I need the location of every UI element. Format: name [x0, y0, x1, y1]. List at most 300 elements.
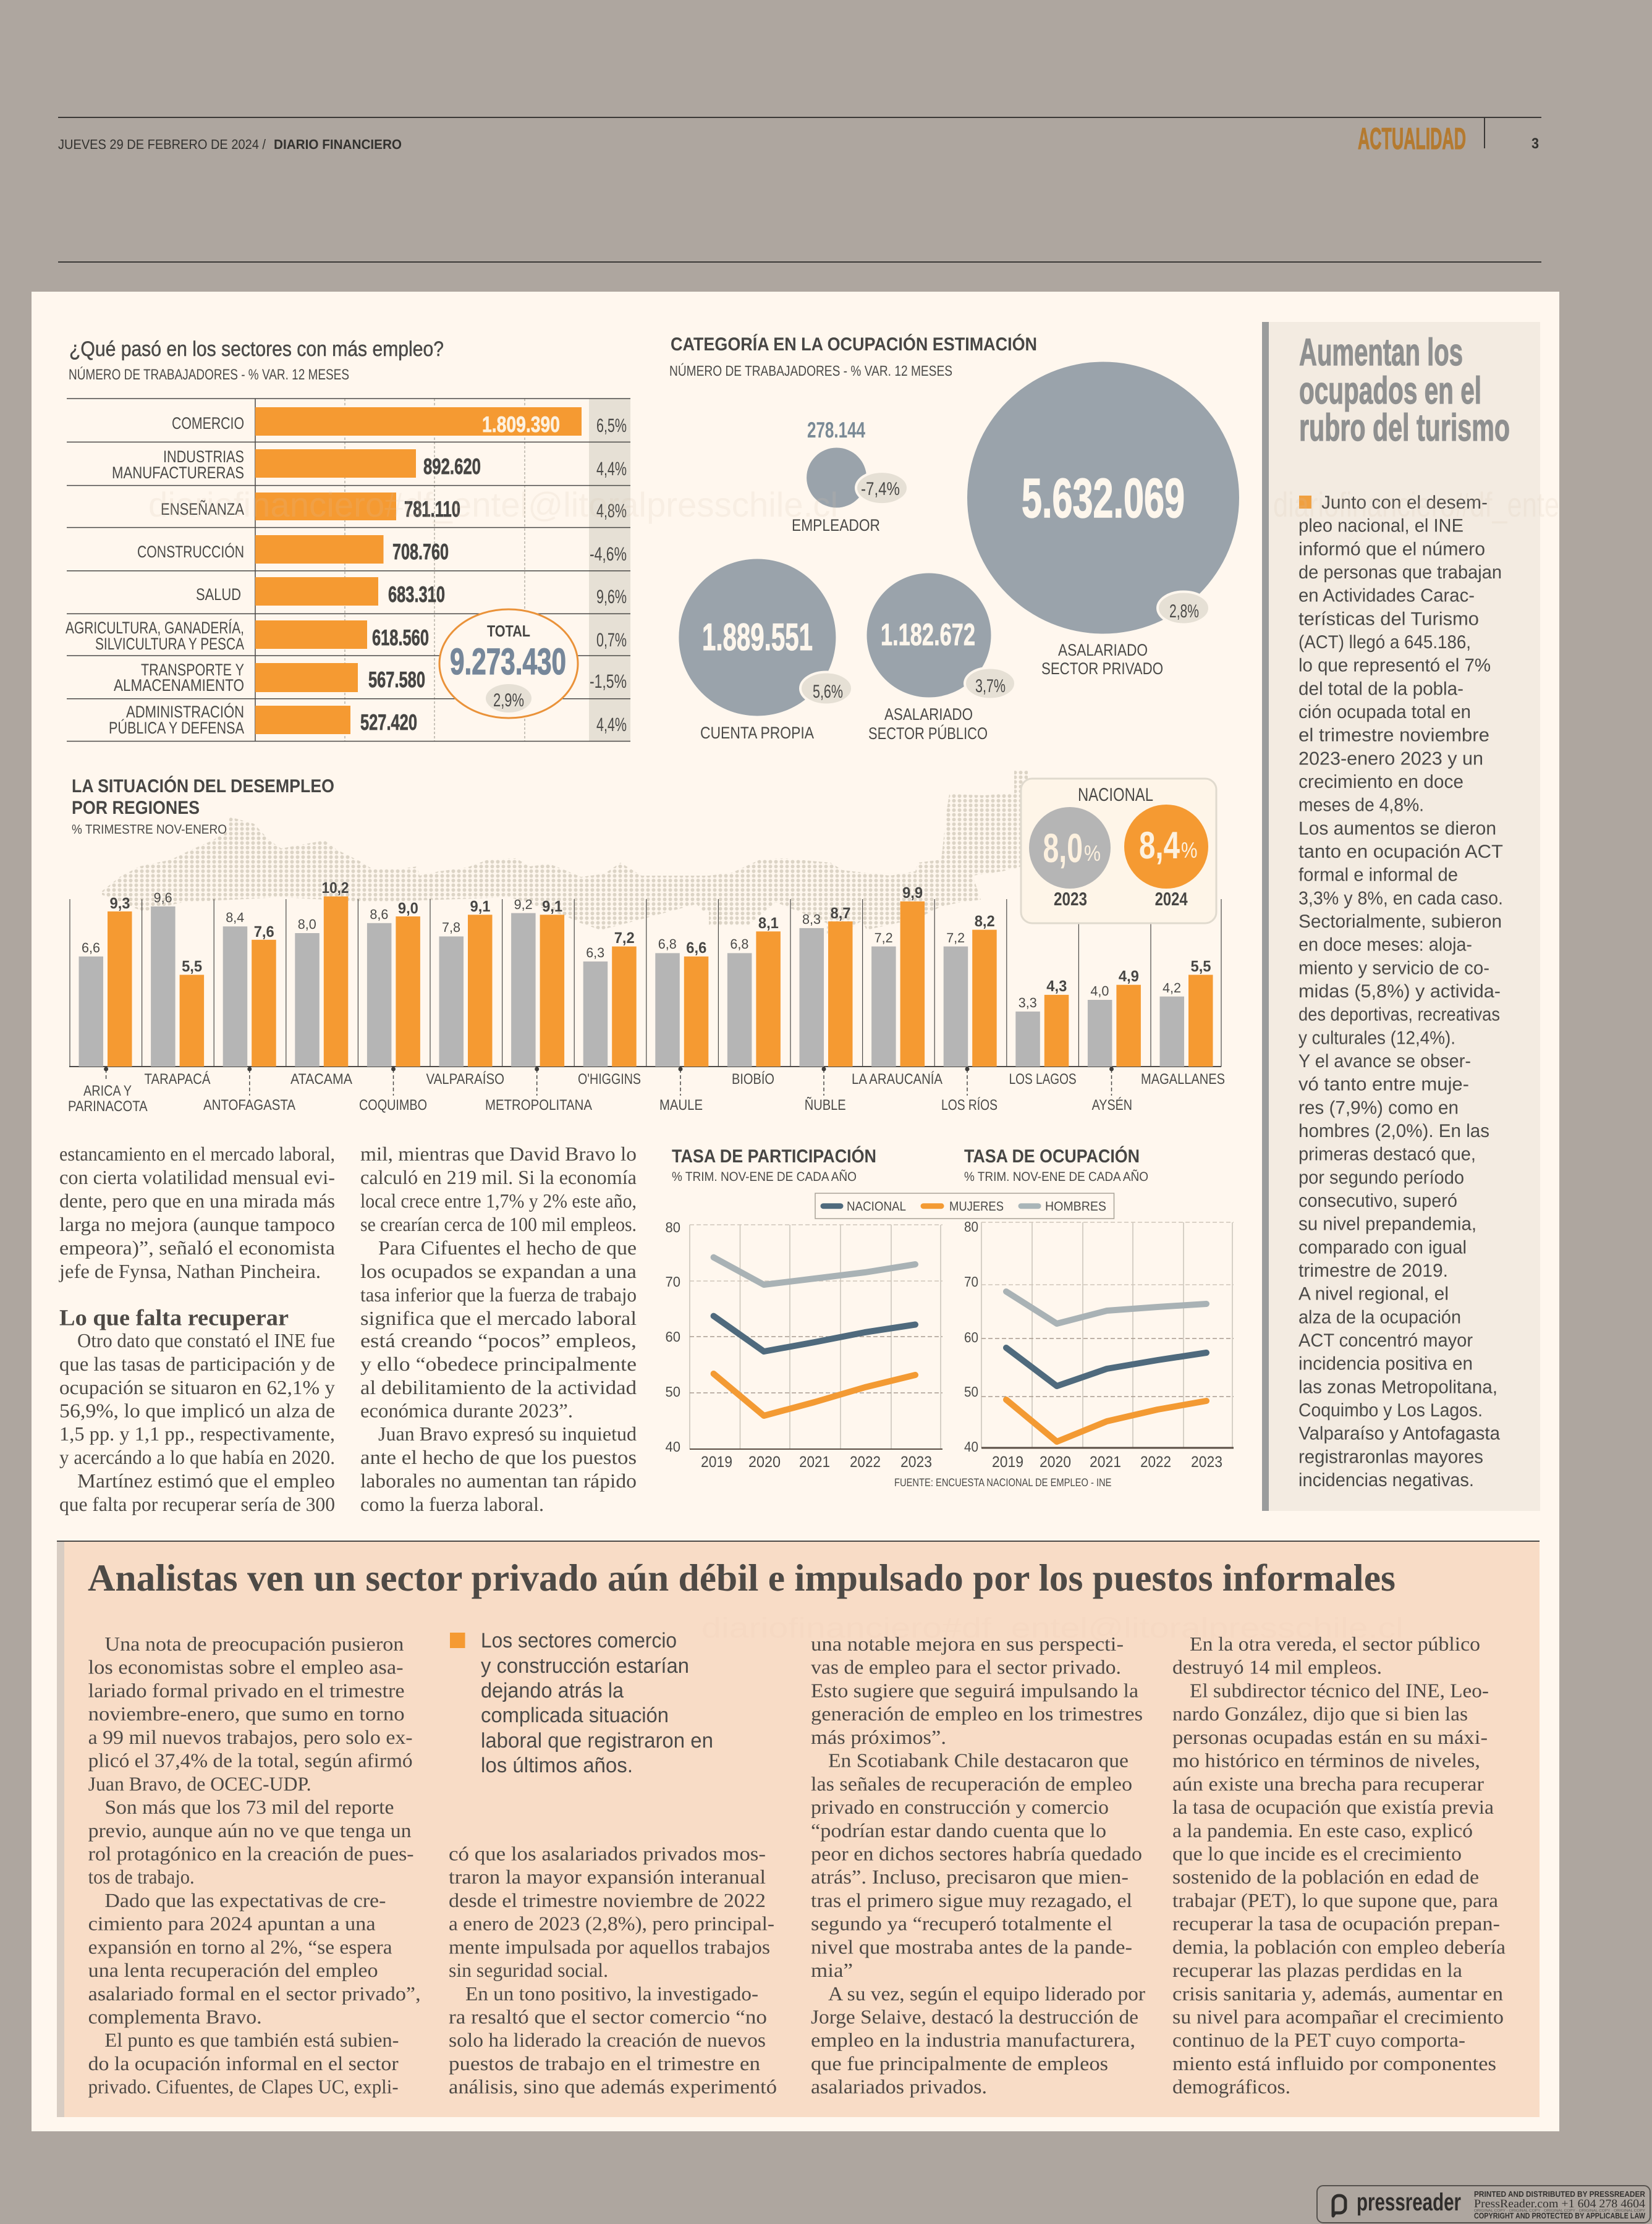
- watermark text, sectores row: diariofinanciero#df_ente: [1273, 485, 1559, 524]
- percent variation column: 4,4%: [596, 458, 627, 480]
- sector labels: PÚBLICA Y DEFENSA: [109, 719, 244, 737]
- article column 1: a 99 mil nuevos trabajos, pero solo ex-: [88, 1726, 413, 1748]
- sidebar body text: miento y servicio de co-: [1298, 958, 1489, 978]
- national comparison box: %: [1084, 840, 1101, 866]
- article column: second text: calculó en 219 mil. Si la economía: [360, 1166, 637, 1188]
- article column: left text: larga no mejora (aunque tampoco: [59, 1213, 335, 1235]
- grey value labels (2023): 6,8: [730, 936, 748, 952]
- main cream page panel: [32, 292, 1559, 2131]
- article column 3: las señales de recuperación de empleo: [811, 1772, 1132, 1795]
- heading: desempleo: [72, 776, 334, 818]
- sidebar body text: Sectorialmente, subieron: [1298, 911, 1502, 932]
- article column 1: los economistas sobre el empleo asa-: [88, 1656, 404, 1678]
- bar values: 892.620: [423, 454, 481, 479]
- article column 3: tras el primero sigue muy rezagado, el: [811, 1889, 1132, 1911]
- sector labels: AGRICULTURA, GANADERÍA,: [66, 619, 244, 637]
- sector labels: MANUFACTURERAS: [112, 463, 244, 482]
- article column 2: mente impulsada por aquellos trabajos: [449, 1935, 770, 1958]
- line charts panel: [665, 1146, 1234, 1489]
- sidebar body text: las zonas Metropolitana,: [1298, 1377, 1497, 1397]
- sidebar body text: meses de 4,8%.: [1298, 795, 1424, 816]
- bubble: cuenta propia: 1.889.551: [702, 616, 813, 659]
- sector labels: [66, 414, 244, 737]
- article column 4: recuperar la tasa de ocupación prepan-: [1172, 1913, 1500, 1935]
- line chart: tasa de ocupación: 50: [964, 1384, 978, 1400]
- region name labels: METROPOLITANA: [485, 1097, 592, 1114]
- heading: sectores: ¿Qué pasó en los sectores con más empleo?: [69, 337, 444, 361]
- subheading: desempleo: % TRIMESTRE NOV-ENERO: [72, 822, 227, 837]
- region name labels: ÑUBLE: [805, 1096, 846, 1114]
- sector labels: INDUSTRIAS: [163, 447, 244, 466]
- pull quote: dejando atrás la: [481, 1679, 624, 1702]
- line chart: tasa de participación: 60: [665, 1329, 680, 1345]
- total callout: 9.273.430: [450, 641, 566, 682]
- percent variation column: 9,6%: [596, 586, 627, 607]
- sidebar body text: por segundo período: [1298, 1167, 1464, 1188]
- article column 1: Una nota de preocupación pusieron: [104, 1633, 404, 1655]
- article column: left text: ocupación se situaron en 62,1% y: [59, 1376, 335, 1398]
- map of Chile, dotted: [102, 771, 1028, 935]
- sidebar body text: lo que representó el 7%: [1298, 656, 1491, 676]
- article column 3: asalariados privados.: [811, 2076, 987, 2098]
- article column: left text: Otro dato que constató el INE fue: [77, 1329, 335, 1351]
- grey value labels (2023): 8,0: [298, 916, 316, 932]
- orange value labels (2024): 4,9: [1119, 968, 1139, 985]
- pull quote: y construcción estarían: [481, 1654, 689, 1678]
- sidebar body text: Coquimbo y Los Lagos.: [1298, 1400, 1483, 1421]
- sidebar body text: vó tanto entre muje-: [1298, 1075, 1469, 1095]
- orange value labels (2024): 9,1: [470, 898, 491, 915]
- bubble: asalariado sector privado: ASALARIADO: [1058, 641, 1148, 659]
- article column 3: segundo ya “recuperó totalmente el: [811, 1913, 1112, 1935]
- grey value labels (2023): 7,8: [442, 920, 460, 935]
- sidebar body text: midas (5,8%) y activida-: [1298, 981, 1501, 1002]
- page header: [58, 117, 1541, 263]
- sidebar body text: pleo nacional, el INE: [1298, 516, 1464, 536]
- article column 1: previo, aunque aún no ve que tenga un: [88, 1819, 412, 1841]
- article column 1: Son más que los 73 mil del reporte: [104, 1796, 394, 1818]
- sidebar body text: el trimestre noviembre: [1298, 725, 1489, 746]
- pressreader badge: pressreader: [1357, 2189, 1461, 2216]
- article column 4: mo histórico en términos de niveles,: [1172, 1749, 1480, 1772]
- sector labels: COMERCIO: [172, 414, 244, 433]
- line chart: tasa de participación: 2020: [748, 1453, 781, 1471]
- article column 1: una lenta recuperación del empleo: [88, 1959, 378, 1981]
- orange value labels (2024): 9,1: [542, 898, 562, 915]
- line chart: tasa de ocupación: 2020: [1040, 1453, 1071, 1471]
- national comparison box: 2024: [1155, 889, 1188, 910]
- sidebar body text: A nivel regional, el: [1298, 1284, 1449, 1304]
- orange value labels (2024): 7,2: [614, 929, 635, 947]
- sidebar body text: informó que el número: [1298, 539, 1485, 559]
- line chart: tasa de participación: 2021: [799, 1453, 830, 1471]
- article column: second text: al debilitamiento de la actividad: [360, 1376, 637, 1398]
- orange value labels (2024): 7,6: [254, 923, 274, 941]
- sidebar heading: [1299, 331, 1510, 449]
- heading: desempleo: POR REGIONES: [72, 798, 200, 818]
- article column: left text: que las tasas de participación y de: [59, 1353, 335, 1375]
- article column 4: trabajar (PET), lo que supone que, para: [1172, 1889, 1498, 1911]
- bar values: 683.310: [388, 581, 445, 607]
- article column 2: solo ha liderado la creación de nuevos: [449, 2029, 766, 2051]
- article column 3: más próximos”.: [811, 1726, 946, 1748]
- line chart: tasa de ocupación: 2022: [1140, 1453, 1171, 1471]
- sector labels: ALMACENAMIENTO: [114, 676, 244, 695]
- sidebar body text: des deportivas, recreativas: [1298, 1005, 1500, 1025]
- sidebar body text: res (7,9%) como en: [1298, 1097, 1459, 1118]
- grey value labels (2023): 4,0: [1090, 983, 1109, 999]
- bubble: cuenta propia: [679, 559, 852, 742]
- sidebar body text: consecutivo, superó: [1298, 1191, 1457, 1211]
- percent variation column: -4,6%: [590, 543, 627, 565]
- article column 1: [88, 1633, 421, 2098]
- percent variation column: 0,7%: [596, 629, 627, 651]
- sidebar body text: [1298, 493, 1503, 1490]
- line chart: tasa de ocupación: 70: [964, 1274, 978, 1290]
- article column: left text: [59, 1143, 335, 1515]
- grey value labels (2023): 4,2: [1163, 980, 1181, 996]
- article column 4: destruyó 14 mil empleos.: [1172, 1656, 1382, 1678]
- sidebar body text: registraronlas mayores: [1298, 1447, 1483, 1467]
- article column 1: lariado formal privado en el trimestre: [88, 1679, 405, 1701]
- article column: second text: ante el hecho de que los puestos: [360, 1446, 637, 1468]
- region name labels: COQUIMBO: [359, 1097, 427, 1114]
- article column 1: Dado que las expectativas de cre-: [104, 1889, 386, 1911]
- sidebar body text: formal e informal de: [1298, 865, 1458, 886]
- bar chart panel: sectores con más empleo: [66, 337, 630, 742]
- orange value labels (2024): 9,9: [902, 884, 923, 902]
- line chart: tasa de ocupación: [964, 1219, 1234, 1471]
- region name labels: VALPARAÍSO: [426, 1071, 504, 1088]
- pressreader badge: ORIGINAL COPY · ORIGINAL COPY · ORIGINAL COPY · ORIGINAL COPY · ORIGINAL COPY: [1474, 2209, 1645, 2213]
- grey value labels (2023): 6,6: [82, 940, 100, 955]
- page header: 3: [1531, 135, 1539, 152]
- national comparison box: 2023: [1054, 889, 1087, 910]
- line chart: tasa de participación: 2023: [900, 1453, 932, 1471]
- orange value labels (2024): 8,1: [758, 915, 779, 932]
- pull quote: [481, 1629, 713, 1777]
- sidebar body text: (ACT) llegó a 645.186,: [1298, 632, 1471, 653]
- region name labels: TARAPACÁ: [145, 1071, 210, 1088]
- orange value labels (2024): 10,2: [321, 879, 349, 897]
- sector labels: ENSEÑANZA: [161, 500, 244, 518]
- article column: left text: dente, pero que en una mirada más: [59, 1190, 335, 1212]
- pressreader badge: [1317, 2186, 1650, 2223]
- sidebar body text: ACT concentró mayor: [1298, 1330, 1473, 1351]
- sidebar body text: trimestre de 2019.: [1298, 1261, 1448, 1281]
- bubble: cuenta propia: CUENTA PROPIA: [700, 724, 814, 742]
- sidebar body text: y culturales (12,4%).: [1298, 1028, 1455, 1048]
- grey value labels (2023): 6,8: [658, 936, 677, 952]
- article column 3: atrás”. Incluso, precisaron que mien-: [811, 1866, 1129, 1888]
- watermark text, sectores row: diariofinanciero#df_entel@litoralpresschile.cl: [148, 485, 838, 524]
- grey value labels (2023): [82, 890, 1181, 1010]
- region name labels: ARICA Y: [83, 1083, 132, 1099]
- article column: second text: Para Cifuentes el hecho de que: [378, 1237, 637, 1259]
- region name labels: BIOBÍO: [732, 1071, 774, 1088]
- article column 3: una notable mejora en sus perspecti-: [811, 1633, 1124, 1655]
- subheading: categoría: NÚMERO DE TRABAJADORES - % VAR. 12 MESES: [669, 363, 952, 379]
- article column: second text: se crearían cerca de 100 mil empleos.: [360, 1213, 637, 1235]
- sidebar body text: 2023-enero 2023 y un: [1298, 748, 1483, 769]
- grey value labels (2023): 3,3: [1019, 995, 1037, 1010]
- bar values: 708.760: [392, 539, 449, 564]
- bar values: 527.420: [360, 709, 417, 735]
- article column 1: asalariado formal en el sector privado”,: [88, 1982, 421, 2005]
- total callout: TOTAL: [487, 622, 530, 640]
- sidebar body text: terísticas del Turismo: [1298, 609, 1479, 629]
- orange value labels (2024): 8,2: [975, 913, 995, 930]
- bubble: empleador: 278.144: [807, 417, 865, 442]
- legend: NACIONAL: [847, 1199, 906, 1214]
- bar values: 1.809.390: [482, 412, 560, 437]
- article column 1: complementa Bravo.: [88, 2006, 262, 2028]
- sector labels: ADMINISTRACIÓN: [126, 703, 244, 721]
- subheading: tasa de ocupación: % TRIM. NOV-ENE DE CADA AÑO: [964, 1169, 1148, 1184]
- sidebar heading: ocupados en el: [1299, 370, 1481, 412]
- region name labels: LA ARAUCANÍA: [852, 1071, 942, 1088]
- grey value labels (2023): 8,3: [802, 911, 821, 927]
- line chart: tasa de participación: 80: [665, 1219, 680, 1235]
- sidebar heading: rubro del turismo: [1299, 407, 1510, 449]
- sidebar body text: Los aumentos se dieron: [1298, 818, 1496, 839]
- article column 2: có que los asalariados privados mos-: [449, 1843, 766, 1865]
- article column 1: rol protagónico en la creación de pues-: [88, 1843, 414, 1865]
- line chart: tasa de participación: 2019: [701, 1453, 732, 1471]
- sidebar body text: incidencias negativas.: [1298, 1470, 1474, 1490]
- line chart: tasa de participación: [665, 1219, 942, 1471]
- bubble: empleador: -7,4%: [861, 479, 900, 499]
- article column 4: su nivel para acompañar el crecimiento: [1172, 2006, 1504, 2028]
- sidebar body text: crecimiento en doce: [1298, 772, 1464, 792]
- national comparison box: 8,0: [1043, 825, 1083, 871]
- article column 1: plicó el 37,4% de la total, según afirmó: [88, 1749, 413, 1772]
- sidebar body text: Junto con el desem-: [1321, 493, 1488, 513]
- subheading: sectores: NÚMERO DE TRABAJADORES - % VAR. 12 MESES: [69, 366, 349, 383]
- sidebar body text: hombres (2,0%). En las: [1298, 1121, 1489, 1141]
- article column 3: nivel que mostraba antes de la pande-: [811, 1935, 1132, 1958]
- percent variation column: 4,8%: [596, 500, 627, 522]
- article column 4: sostenido de la población en edad de: [1172, 1866, 1479, 1888]
- article column 4: aún existe una brecha para recuperar: [1172, 1772, 1484, 1795]
- sidebar body text: en Actividades Carac-: [1298, 586, 1475, 606]
- article column: second text: significa que el mercado laboral: [360, 1307, 637, 1329]
- line chart: tasa de ocupación: 2021: [1090, 1453, 1121, 1471]
- grey value labels (2023): 7,2: [946, 930, 965, 945]
- article column 4: recuperar las plazas perdidas en la: [1172, 1959, 1462, 1981]
- page header: ACTUALIDAD: [1358, 122, 1466, 156]
- region name labels: O'HIGGINS: [578, 1071, 641, 1088]
- grey value labels (2023): 6,3: [586, 945, 604, 960]
- bubble: empleador: [792, 417, 908, 535]
- article column: left text: y acercándo a lo que había en 2020.: [59, 1446, 335, 1468]
- bubble: asalariado sector público: [866, 573, 1015, 743]
- percent variation column: -1,5%: [590, 670, 627, 692]
- sidebar body text: Y el avance se obser-: [1298, 1051, 1471, 1072]
- sidebar body text: 3,3% y 8%, en cada caso.: [1298, 888, 1503, 908]
- article column 2: sin seguridad social.: [449, 1959, 608, 1981]
- region name labels: MAULE: [659, 1097, 703, 1114]
- article column 3: A su vez, según el equipo liderado por: [828, 1982, 1145, 2005]
- article column 4: que lo que incide es el crecimiento: [1172, 1843, 1462, 1865]
- article column: left text: 1,5 pp. y 1,1 pp., respectivamente,: [59, 1423, 335, 1445]
- bubble: asalariado sector privado: 2,8%: [1169, 601, 1199, 622]
- region name labels: PARINACOTA: [68, 1098, 148, 1115]
- article column 2: En un tono positivo, la investigado-: [465, 1982, 758, 2005]
- article column 3: que fue principalmente de empleos: [811, 2052, 1108, 2074]
- percent variation column: [590, 415, 627, 735]
- line chart: tasa de ocupación: 40: [964, 1439, 978, 1455]
- article column 4: continuo de la PET cuyo comporta-: [1172, 2029, 1465, 2051]
- article column: left text: empeora)”, señaló el economista: [59, 1237, 335, 1259]
- article column: left text: que falta por recuperar sería de 300: [59, 1493, 335, 1515]
- icon: pressreader logo: [1333, 2196, 1345, 2216]
- national comparison box: [1021, 779, 1216, 923]
- article column: second text: los ocupados se expandan a una: [360, 1260, 637, 1282]
- grey value labels (2023): 9,2: [514, 897, 533, 912]
- article column: second text: laborales no aumentan tan rápido: [360, 1469, 637, 1492]
- sidebar body text: en doce meses: aloja-: [1298, 935, 1472, 955]
- article column 2: desde el trimestre noviembre de 2022: [449, 1889, 766, 1911]
- bubble: empleador: EMPLEADOR: [792, 516, 880, 535]
- heading: tasa de participación: TASA DE PARTICIPACIÓN: [672, 1146, 876, 1167]
- pull quote: los últimos años.: [481, 1754, 633, 1777]
- icon: orange square: [450, 1633, 465, 1648]
- article column: second text: tasa inferior que la fuerza de trabajo: [360, 1283, 637, 1306]
- orange value labels (2024): 9,3: [110, 895, 130, 912]
- line chart: tasa de ocupación: 2023: [1191, 1453, 1222, 1471]
- article column: left text: con cierta volatilidad mensual evi-: [59, 1166, 335, 1188]
- article column 4: la tasa de ocupación que existía previa: [1172, 1796, 1494, 1818]
- line chart: tasa de participación: 50: [665, 1384, 680, 1400]
- region name labels: [68, 1071, 1225, 1115]
- sector labels: TRANSPORTE Y: [141, 661, 244, 679]
- sector labels: CONSTRUCCIÓN: [137, 543, 244, 561]
- article column 3: privado en construcción y comercio: [811, 1796, 1109, 1818]
- bubble chart panel: categoría en la ocupación: [669, 334, 1239, 743]
- line chart: tasa de participación: 2022: [850, 1453, 881, 1471]
- bubble: asalariado sector público: 3,7%: [975, 676, 1006, 696]
- bubble: asalariado sector público: ASALARIADO: [884, 705, 973, 724]
- bar values: 618.560: [372, 625, 429, 650]
- orange value labels (2024): 5,5: [1190, 958, 1211, 975]
- sidebar body text: su nivel prepandemia,: [1298, 1214, 1476, 1235]
- sidebar body text: alza de la ocupación: [1298, 1307, 1461, 1327]
- article column 2: a enero de 2023 (2,8%), pero principal-: [449, 1913, 774, 1935]
- article column 4: personas ocupadas están en su máxi-: [1172, 1726, 1488, 1748]
- pull quote: laboral que registraron en: [481, 1729, 713, 1753]
- article column: left text: Lo que falta recuperar: [59, 1305, 289, 1331]
- article column: left text: estancamiento en el mercado laboral,: [59, 1143, 335, 1165]
- grey value labels (2023): 8,4: [226, 910, 244, 925]
- percent variation column: 6,5%: [596, 415, 627, 436]
- page header: JUEVES 29 DE FEBRERO DE 2024 /: [58, 137, 266, 152]
- article column 3: Esto sugiere que seguirá impulsando la: [811, 1679, 1138, 1701]
- region name labels: LOS LAGOS: [1009, 1071, 1077, 1088]
- article column 4: En la otra vereda, el sector público: [1190, 1633, 1480, 1655]
- bar values: 567.580: [368, 667, 425, 692]
- legend: HOMBRES: [1045, 1199, 1106, 1214]
- article column 3: peor en dichos sectores habría quedado: [811, 1843, 1142, 1865]
- bottom article panel: [57, 1541, 1540, 2117]
- sidebar body text: de personas que trabajan: [1298, 562, 1502, 583]
- article column 1: El punto es que también está subien-: [104, 2029, 399, 2051]
- line chart: tasa de ocupación: 2019: [992, 1453, 1023, 1471]
- article column 1: privado. Cifuentes, de Clapes UC, expli-: [88, 2076, 399, 2098]
- article column 3: “podrían estar dando cuenta que lo: [811, 1819, 1106, 1841]
- bar chart panel: desempleo por regiones: [68, 771, 1225, 1115]
- line chart: tasa de participación: 40: [665, 1439, 680, 1455]
- article column: left text: Martínez estimó que el empleo: [77, 1469, 335, 1492]
- heading: tasa de ocupación: TASA DE OCUPACIÓN: [964, 1146, 1140, 1167]
- article column: left text: jefe de Fynsa, Nathan Pincheira.: [59, 1260, 321, 1282]
- regional bars: [79, 897, 1213, 1067]
- sector labels: SILVICULTURA Y PESCA: [95, 635, 244, 653]
- total callout: 2,9%: [493, 690, 524, 711]
- article column: second text: local crece entre 1,7% y 2% este año,: [360, 1190, 637, 1212]
- sidebar body text: incidencia positiva en: [1298, 1354, 1473, 1374]
- article column 4: demia, la población con empleo debería: [1172, 1935, 1506, 1958]
- article column: second text: económica durante 2023”.: [360, 1399, 573, 1421]
- bars: [255, 407, 582, 734]
- pull quote: complicada situación: [481, 1704, 669, 1727]
- article column 4: [1172, 1633, 1506, 2098]
- article column 2: ra resaltó que el sector comercio “no: [449, 2006, 767, 2028]
- bubble: asalariado sector privado: SECTOR PRIVADO: [1041, 659, 1163, 678]
- national comparison box: 8,4: [1139, 824, 1180, 867]
- article column 1: Juan Bravo, de OCEC-UDP.: [88, 1772, 311, 1795]
- region name labels: LOS RÍOS: [941, 1097, 998, 1114]
- line chart: tasa de ocupación: 60: [964, 1329, 978, 1345]
- sidebar body text: tanto en ocupación ACT: [1298, 842, 1503, 862]
- article column 1: do la ocupación informal en el sector: [88, 2052, 399, 2074]
- bubble: asalariado sector público: SECTOR PÚBLICO: [868, 724, 988, 743]
- article column 4: demográficos.: [1172, 2076, 1290, 2098]
- pressreader badge: PressReader.com +1 604 278 4604: [1474, 2197, 1646, 2210]
- article column 4: nardo González, dijo que si bien las: [1172, 1702, 1468, 1725]
- article column 3: empleo en la industria manufacturera,: [811, 2029, 1135, 2051]
- article column 3: mia”: [811, 1959, 853, 1981]
- article column 2: [449, 1843, 777, 2098]
- article column 1: noviembre-enero, que sumo en torno: [88, 1702, 405, 1725]
- page header: DIARIO FINANCIERO: [274, 137, 402, 152]
- article column: second text: como la fuerza laboral.: [360, 1493, 544, 1515]
- sidebar body text: Valparaíso y Antofagasta: [1298, 1424, 1500, 1444]
- article column 3: [811, 1633, 1145, 2098]
- article column 4: miento está influido por componentes: [1172, 2052, 1496, 2074]
- orange value labels (2024): 4,3: [1046, 978, 1067, 995]
- sidebar panel: turismo: [1262, 322, 1540, 1511]
- article column: second text: [360, 1143, 637, 1515]
- region name labels: ATACAMA: [290, 1071, 352, 1088]
- legend: [815, 1193, 1114, 1219]
- article column: second text: Juan Bravo expresó su inquietud: [378, 1423, 637, 1445]
- watermark text, sectores row: [148, 485, 1559, 524]
- sidebar body text: del total de la pobla-: [1298, 679, 1464, 699]
- article column: left text: 56,9%, lo que implicó un alza de: [59, 1399, 335, 1421]
- bubble: cuenta propia: 5,6%: [813, 682, 843, 702]
- article column 2: puestos de trabajo en el trimestre en: [449, 2052, 760, 2074]
- grey value labels (2023): 9,6: [154, 890, 172, 905]
- article column: second text: está creando “pocos” empleos,: [360, 1329, 637, 1351]
- orange value labels (2024): 6,6: [686, 939, 706, 957]
- heading: desempleo: LA SITUACIÓN DEL DESEMPLEO: [72, 776, 334, 797]
- source note: FUENTE: ENCUESTA NACIONAL DE EMPLEO - INE: [894, 1476, 1111, 1489]
- article column 1: tos de trabajo.: [88, 1866, 195, 1888]
- bar values: [360, 412, 560, 735]
- legend: MUJERES: [949, 1199, 1004, 1214]
- leader lines: [106, 1069, 1112, 1096]
